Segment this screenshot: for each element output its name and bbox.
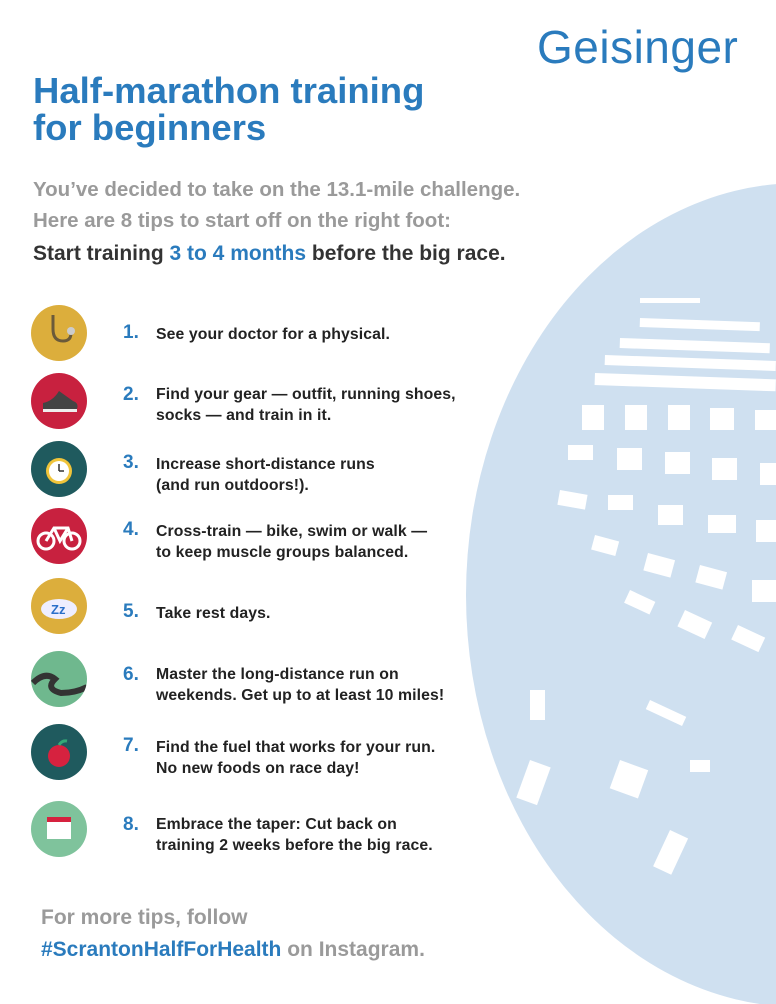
tip 3	[31, 441, 375, 497]
tip 6: Master the long-distance run on	[156, 666, 399, 683]
tip 4: to keep muscle groups balanced.	[156, 544, 408, 561]
icon: stopwatch	[31, 441, 87, 497]
icon: road	[31, 651, 87, 707]
tip 3: (and run outdoors!).	[156, 477, 309, 494]
tip 8: 8.	[123, 814, 139, 835]
tip 6	[31, 651, 444, 707]
tip 2	[31, 373, 456, 429]
footer text: #ScrantonHalfForHealth on Instagram.	[41, 938, 425, 961]
title: for beginners	[33, 107, 266, 148]
tip 6: 6.	[123, 664, 139, 685]
intro text: You’ve decided to take on the 13.1-mile challenge.	[33, 178, 520, 201]
tip 7: Find the fuel that works for your run.	[156, 739, 435, 756]
tip 5: Take rest days.	[156, 605, 270, 622]
tip 3: Increase short-distance runs	[156, 456, 375, 473]
tip 7	[31, 724, 435, 780]
logo: Geisinger: Geisinger	[537, 21, 738, 73]
tip 1	[31, 305, 390, 361]
tip 4: Cross-train — bike, swim or walk —	[156, 523, 427, 540]
tip 3: 3.	[123, 452, 139, 473]
icon: calendar	[31, 801, 87, 857]
icon: stethoscope	[31, 305, 87, 361]
title: Half-marathon training	[33, 70, 424, 111]
tip 2: Find your gear — outfit, running shoes,	[156, 386, 456, 403]
tip 1: See your doctor for a physical.	[156, 326, 390, 343]
tip 8: training 2 weeks before the big race.	[156, 837, 433, 854]
tip 5: 5.	[123, 601, 139, 622]
footer text	[41, 906, 425, 961]
tip 4	[31, 508, 428, 564]
footer text: For more tips, follow	[41, 906, 248, 929]
icon: shoe	[31, 373, 87, 429]
tip 7: No new foods on race day!	[156, 760, 360, 777]
tip 5	[31, 578, 270, 634]
icon: bike	[31, 508, 87, 564]
title	[33, 70, 424, 148]
intro text	[33, 178, 520, 232]
tip 8	[31, 801, 433, 857]
tip 4: 4.	[123, 519, 139, 540]
tip 1: 1.	[123, 322, 139, 343]
intro text: Here are 8 tips to start off on the right foot:	[33, 209, 451, 232]
icon: apple	[31, 724, 87, 780]
start training line: Start training 3 to 4 months before the big race.	[33, 242, 506, 265]
tip 8: Embrace the taper: Cut back on	[156, 816, 397, 833]
tip 7: 7.	[123, 735, 139, 756]
icon: sleep cloud: Zz	[51, 602, 66, 617]
tip 2: socks — and train in it.	[156, 407, 331, 424]
tip 6: weekends. Get up to at least 10 miles!	[156, 687, 444, 704]
tip 2: 2.	[123, 384, 139, 405]
icon: sleep cloud	[31, 578, 87, 634]
